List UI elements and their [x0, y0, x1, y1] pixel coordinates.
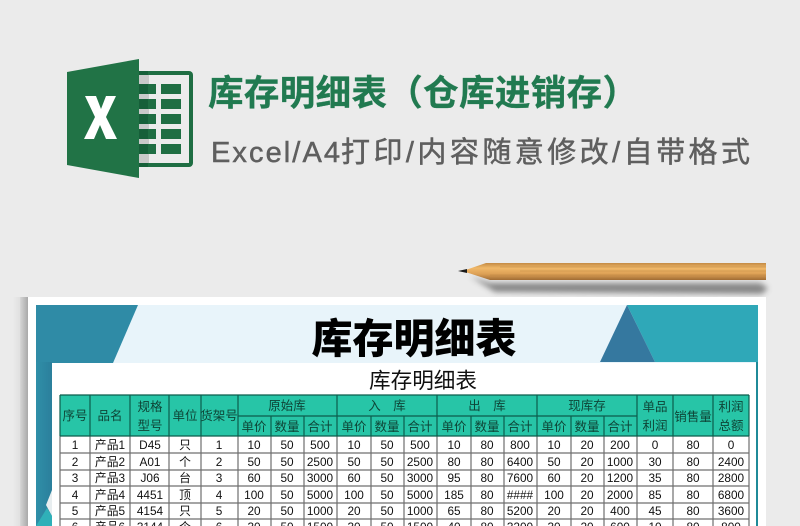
- table row 2: 2: [216, 455, 222, 469]
- table row 5: 80: [686, 504, 700, 518]
- table header labels: 单品: [642, 400, 668, 414]
- table row 2: 80: [447, 455, 461, 469]
- table row 4: 顶: [179, 488, 191, 502]
- table row 1: 10: [247, 438, 261, 452]
- sheet main title: 库存明细表: [312, 316, 516, 362]
- table header labels: 数量: [474, 419, 500, 434]
- panel: header band: [36, 305, 758, 363]
- table row 4: 20: [580, 488, 594, 502]
- table row 2: 30: [648, 455, 662, 469]
- table row 5: 5: [72, 504, 79, 518]
- table row 2: 50: [247, 455, 261, 469]
- table row 3: 3000: [307, 471, 334, 485]
- table row 4: 4451: [137, 488, 163, 502]
- table row 2: 50: [280, 455, 294, 469]
- table row 3: 50: [380, 471, 394, 485]
- table row 5: 20: [547, 504, 561, 518]
- table row 3: [72, 471, 745, 485]
- table row 1: 10: [347, 438, 361, 452]
- table row 3: 60: [547, 471, 561, 485]
- table row 2: 产品2: [95, 455, 125, 469]
- table header labels: 合计: [307, 419, 333, 434]
- table row 3: 2800: [718, 471, 745, 485]
- table row 1: 50: [380, 438, 394, 452]
- table header labels: 原始库: [268, 398, 306, 413]
- table grid: [60, 395, 749, 526]
- table row 1: 500: [310, 438, 330, 452]
- table row 1: 50: [280, 438, 294, 452]
- table row 6: [72, 520, 741, 526]
- table row 5: 400: [610, 504, 630, 518]
- table row 5: 5: [216, 504, 223, 518]
- table header labels: 合计: [407, 419, 433, 434]
- table row 2: [72, 455, 745, 469]
- table header labels: 销售量: [674, 409, 712, 424]
- table row 3: 台: [179, 471, 191, 485]
- table row 5: 80: [480, 504, 494, 518]
- table row 3: 产品3: [95, 471, 126, 485]
- table row 3: 60: [247, 471, 261, 485]
- table header fill: [60, 395, 749, 436]
- table row 3: 20: [580, 471, 594, 485]
- table row 2: 1000: [607, 455, 634, 469]
- subtitle: 打印/内容随意修改/自带格式: [341, 136, 750, 169]
- table row 4: 产品4: [95, 488, 126, 502]
- table row 3: 50: [280, 471, 294, 485]
- table header labels: 现库存: [568, 398, 606, 413]
- table row 1: [72, 438, 735, 452]
- table header labels: 出 库: [468, 398, 506, 413]
- table row 1: 0: [652, 438, 659, 452]
- table row 5: 产品5: [95, 504, 126, 518]
- table row 1: 1: [216, 438, 222, 452]
- table header labels: 单价: [441, 420, 467, 434]
- table header labels: 利润: [718, 400, 744, 414]
- table row 1: 0: [728, 438, 735, 452]
- table row 3: 35: [648, 471, 662, 485]
- table row 3: 3000: [407, 471, 434, 485]
- table header labels: [62, 398, 744, 434]
- table row 4: 100: [344, 488, 364, 502]
- table row 1: 1: [72, 438, 78, 452]
- table row 5: 20: [247, 504, 261, 518]
- table row 3: 1200: [607, 471, 634, 485]
- table row 2: A01: [140, 455, 160, 469]
- table header labels: 单价: [541, 420, 567, 434]
- table row 3: 7600: [507, 471, 534, 485]
- table row 4: 4: [72, 488, 79, 502]
- pencil shadow: [470, 276, 768, 294]
- subtitle: Excel/A4: [211, 137, 340, 169]
- table row 2: 个: [179, 455, 191, 469]
- table row 5: 50: [380, 504, 394, 518]
- table row 1: D45: [139, 438, 161, 452]
- table header labels: 总额: [718, 419, 744, 433]
- table row 1: 10: [547, 438, 561, 452]
- table row 2: 50: [547, 455, 561, 469]
- table header labels: 序号: [62, 408, 88, 423]
- table header labels: 货架号: [200, 408, 238, 423]
- table row 5: 65: [447, 504, 461, 518]
- table row 5: 只: [179, 504, 191, 518]
- table row 5: 3600: [718, 504, 745, 518]
- table row 5: [72, 504, 745, 518]
- table row 4: 2000: [607, 488, 634, 502]
- table row 3: 80: [686, 471, 700, 485]
- icon: Excel logo: [67, 59, 193, 178]
- table row 3: 3: [72, 471, 79, 485]
- table row 1: 200: [610, 438, 630, 452]
- table row 5: 50: [280, 504, 294, 518]
- table row 4: 80: [480, 488, 494, 502]
- table row 4: 6800: [718, 488, 745, 502]
- table row 4: 5000: [407, 488, 434, 502]
- table row 4: 85: [648, 488, 662, 502]
- table row 4: 4: [216, 488, 223, 502]
- table header labels: 单价: [341, 420, 367, 434]
- table header labels: 品名: [97, 408, 123, 423]
- table row 3: 3: [216, 471, 223, 485]
- table row 2: 20: [580, 455, 594, 469]
- table header labels: 单价: [241, 420, 267, 434]
- table caption: 库存明细表: [369, 368, 477, 393]
- table row 4: 5000: [307, 488, 334, 502]
- table row 4: 80: [686, 488, 700, 502]
- icon: pencil: [458, 263, 766, 280]
- panel: right edge line: [756, 362, 758, 526]
- table row 4: 100: [544, 488, 564, 502]
- table row 5: 20: [347, 504, 361, 518]
- table row 3: 95: [447, 471, 461, 485]
- table row 5: 1000: [407, 504, 434, 518]
- table row 1: 10: [447, 438, 461, 452]
- table: [60, 395, 749, 526]
- table row 2: 6400: [507, 455, 534, 469]
- table row 2: 2400: [718, 455, 745, 469]
- table header labels: 利润: [642, 419, 668, 433]
- table row 1: 20: [580, 438, 594, 452]
- table header labels: 合计: [507, 419, 533, 434]
- table row 4: [72, 488, 745, 502]
- table row 2: 80: [686, 455, 700, 469]
- table row 5: 20: [580, 504, 594, 518]
- table row 4: 50: [380, 488, 394, 502]
- table row 5: 1000: [307, 504, 334, 518]
- table header labels: 数量: [574, 419, 600, 434]
- table row 1: 500: [410, 438, 430, 452]
- table header labels: 数量: [374, 419, 400, 434]
- table row 2: 50: [347, 455, 361, 469]
- table row 1: 80: [686, 438, 700, 452]
- table header labels: 数量: [274, 419, 300, 434]
- panel: left side band: [36, 362, 52, 526]
- table row 5: 45: [648, 504, 662, 518]
- table header labels: 型号: [137, 419, 163, 433]
- table row 4: 50: [280, 488, 294, 502]
- table row 2: 2500: [307, 455, 334, 469]
- table row 4: ####: [507, 488, 534, 502]
- table row 5: 4154: [137, 504, 164, 518]
- table row 2: 2: [72, 455, 78, 469]
- table row 4: 185: [444, 488, 464, 502]
- table row 2: 50: [380, 455, 394, 469]
- table row 4: 100: [244, 488, 264, 502]
- table row 1: 产品1: [95, 438, 125, 452]
- table row 3: 60: [347, 471, 361, 485]
- title: 库存明细表（仓库进销存）: [208, 73, 638, 113]
- table row 2: 80: [480, 455, 494, 469]
- table header labels: 规格: [137, 399, 163, 414]
- table row 1: 只: [179, 438, 191, 452]
- table row 3: 80: [480, 471, 494, 485]
- table row 3: J06: [140, 471, 160, 485]
- table header labels: 入 库: [368, 398, 406, 413]
- table header labels: 合计: [607, 419, 633, 434]
- table row 2: 2500: [407, 455, 434, 469]
- paper stack shadow: [12, 297, 28, 526]
- table header labels: 单位: [172, 408, 198, 423]
- table row 5: 5200: [507, 504, 534, 518]
- paper sheet: [28, 297, 766, 526]
- table row 1: 80: [480, 438, 494, 452]
- table row 1: 800: [510, 438, 530, 452]
